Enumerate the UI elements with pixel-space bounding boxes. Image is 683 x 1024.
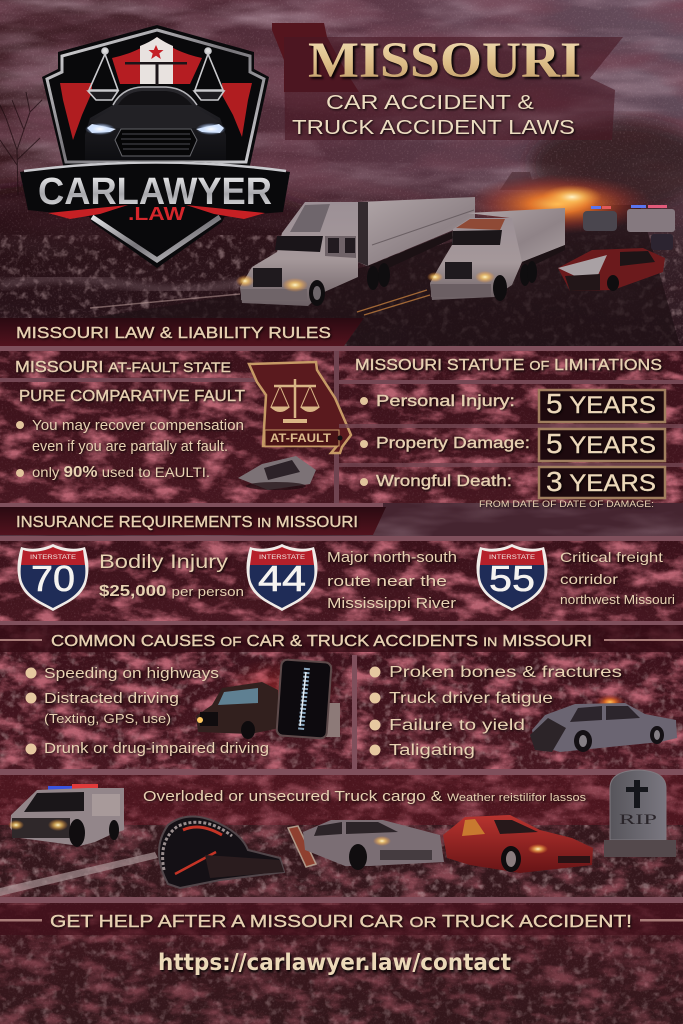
panel: at-fault state: only 90% used to EAULTI. [32, 464, 210, 481]
icon: smartphone [276, 659, 332, 739]
heading: law and liability: MISSOURI LAW & LIABILITY RULES [16, 325, 331, 342]
list: causes right: Failure to yield [389, 717, 525, 734]
bodily injury amount: $25,000 per person [99, 583, 244, 600]
panel: at-fault state: You may recover compensation [32, 417, 244, 434]
list: causes left: Distracted driving [44, 690, 179, 707]
footer [0, 903, 683, 1024]
wordmark: CARLAWYER [38, 171, 272, 213]
row: wrongful death [360, 466, 665, 498]
row: wrongful death: 3 YEARS [546, 466, 656, 497]
heading: law and liability [0, 318, 364, 346]
icon: interstate 44 [246, 544, 318, 611]
trailer [358, 197, 475, 266]
title: Missouri: MISSOURI [308, 33, 581, 89]
route 44 description [327, 549, 457, 612]
route 55 description: northwest Missouri [560, 592, 675, 607]
panel: statute of limitations [339, 357, 683, 498]
row: personal injury: Personal Injury: [376, 393, 515, 410]
list: causes left: Speeding on highways [44, 665, 219, 682]
icon: interstate 55 [476, 544, 548, 611]
icon: ambulance [8, 784, 124, 847]
panel: at-fault state: even if you are partally at fault. [32, 438, 228, 455]
route 44 description: Major north-south [327, 549, 457, 566]
road marking [0, 852, 158, 896]
wrecked red car [558, 248, 665, 291]
trailer [467, 208, 565, 262]
icon: interstate 44: 44 [258, 558, 306, 599]
icon: interstate 70 [18, 544, 88, 611]
red swooshes [48, 205, 128, 219]
heading: insurance requirements [0, 503, 683, 539]
icon: Missouri at-fault map: AT-FAULT [270, 431, 332, 445]
caption: Overloded or unsecured Truck cargo & Weather reistilifor lassos [143, 788, 587, 805]
at-fault label [265, 430, 339, 446]
road [90, 205, 680, 346]
skyline [500, 172, 580, 190]
bullet one [16, 421, 24, 429]
row: property damage: Property Damage: [376, 435, 530, 452]
top flag panel [112, 37, 202, 84]
silver chevron [92, 217, 220, 260]
route 44 description: Mississippi River [327, 595, 456, 612]
cab [430, 218, 522, 300]
.law: .LAW [128, 204, 185, 224]
icon: interstate 55: 55 [489, 558, 535, 599]
icon: speedometer [159, 816, 284, 888]
title banner [272, 23, 623, 140]
name banner [20, 161, 290, 252]
logo: CarLawyer.law shield [20, 25, 290, 268]
list: causes left [26, 665, 269, 757]
icon: Missouri at-fault map [249, 362, 351, 453]
subheading: comparative fault: PURE COMPARATIVE FAULT [19, 388, 245, 405]
icon: interstate 55: INTERSTATE [489, 554, 536, 561]
cab [240, 202, 358, 306]
route 55 description: Critical freight [560, 549, 663, 565]
icon: RIP tombstone: RIP [619, 812, 657, 828]
panel: common causes [0, 625, 683, 773]
scales of justice [270, 379, 320, 423]
row: property damage [360, 428, 665, 461]
heading: at-fault: MISSOURI AT-FAULT STATE [15, 359, 231, 376]
list: causes right: Proken bones & fractures [389, 664, 622, 681]
subtitle line 2: TRUCK ACCIDENT LAWS [292, 117, 575, 139]
car front [85, 87, 226, 160]
route 55 description: corridor [560, 571, 618, 587]
row: wrongful death: Wrongful Death: [376, 473, 512, 490]
row: personal injury [360, 388, 665, 422]
heading: common causes: COMMON CAUSES OF CAR & TRUCK ACCIDENTS IN MISSOURI [51, 633, 592, 650]
truck one [236, 197, 475, 306]
truck two [427, 208, 565, 301]
panel background: law [0, 346, 683, 506]
panel: at-fault state [0, 359, 316, 490]
icon: interstate 44: INTERSTATE [259, 554, 306, 561]
icon: red car [443, 815, 593, 873]
contact url: https://carlawyer.law/contact [158, 950, 511, 976]
icon: RIP tombstone [604, 770, 676, 857]
panel: insurance [0, 536, 683, 626]
list: causes right: Taligating [389, 742, 475, 759]
list: causes right [370, 664, 622, 759]
subtitle line 1: CAR ACCIDENT & [326, 92, 535, 114]
icon: crashed grey car [530, 694, 677, 752]
heading: insurance requirements: INSURANCE REQUIREMENTS IN MISSOURI [16, 514, 358, 531]
panel: crash scene [0, 769, 683, 903]
route 44 description: route near the [327, 573, 447, 590]
icon: interstate 70: 70 [31, 558, 75, 599]
hero scene [0, 0, 683, 346]
scales left [88, 48, 118, 100]
list: causes left: Drunk or drug-impaired driving [44, 740, 269, 757]
bullet two [16, 469, 24, 477]
red side panels [60, 83, 92, 140]
bodily injury: Bodily Injury [99, 551, 228, 573]
list: causes right: Truck driver fatigue [389, 690, 553, 707]
row: property damage: 5 YEARS [546, 428, 656, 459]
footnote: date of damage: FROM DATE OF DATE OF DAMAGE: [479, 499, 654, 509]
heading: statute: MISSOURI STATUTE OF LIMITATIONS [355, 357, 662, 374]
emergency vehicles [583, 205, 675, 250]
icon: wrecked jeep [238, 456, 316, 490]
icon: tow truck [196, 658, 340, 739]
route 55 description [560, 549, 675, 607]
icon: interstate 70: INTERSTATE [30, 554, 77, 561]
icon: traffic barrier [288, 826, 316, 867]
fire [463, 174, 653, 234]
icon: silver car [303, 820, 444, 870]
bare tree [0, 92, 42, 195]
missouri map shape behind title [272, 23, 359, 92]
shield outer [42, 25, 269, 268]
list: causes left: (Texting, GPS, use) [44, 711, 171, 726]
row: personal injury: 5 YEARS [546, 388, 656, 419]
scales right [194, 48, 224, 100]
call to action: GET HELP AFTER A MISSOURI CAR OR TRUCK ACCIDENT! [50, 911, 632, 931]
star [148, 45, 164, 59]
